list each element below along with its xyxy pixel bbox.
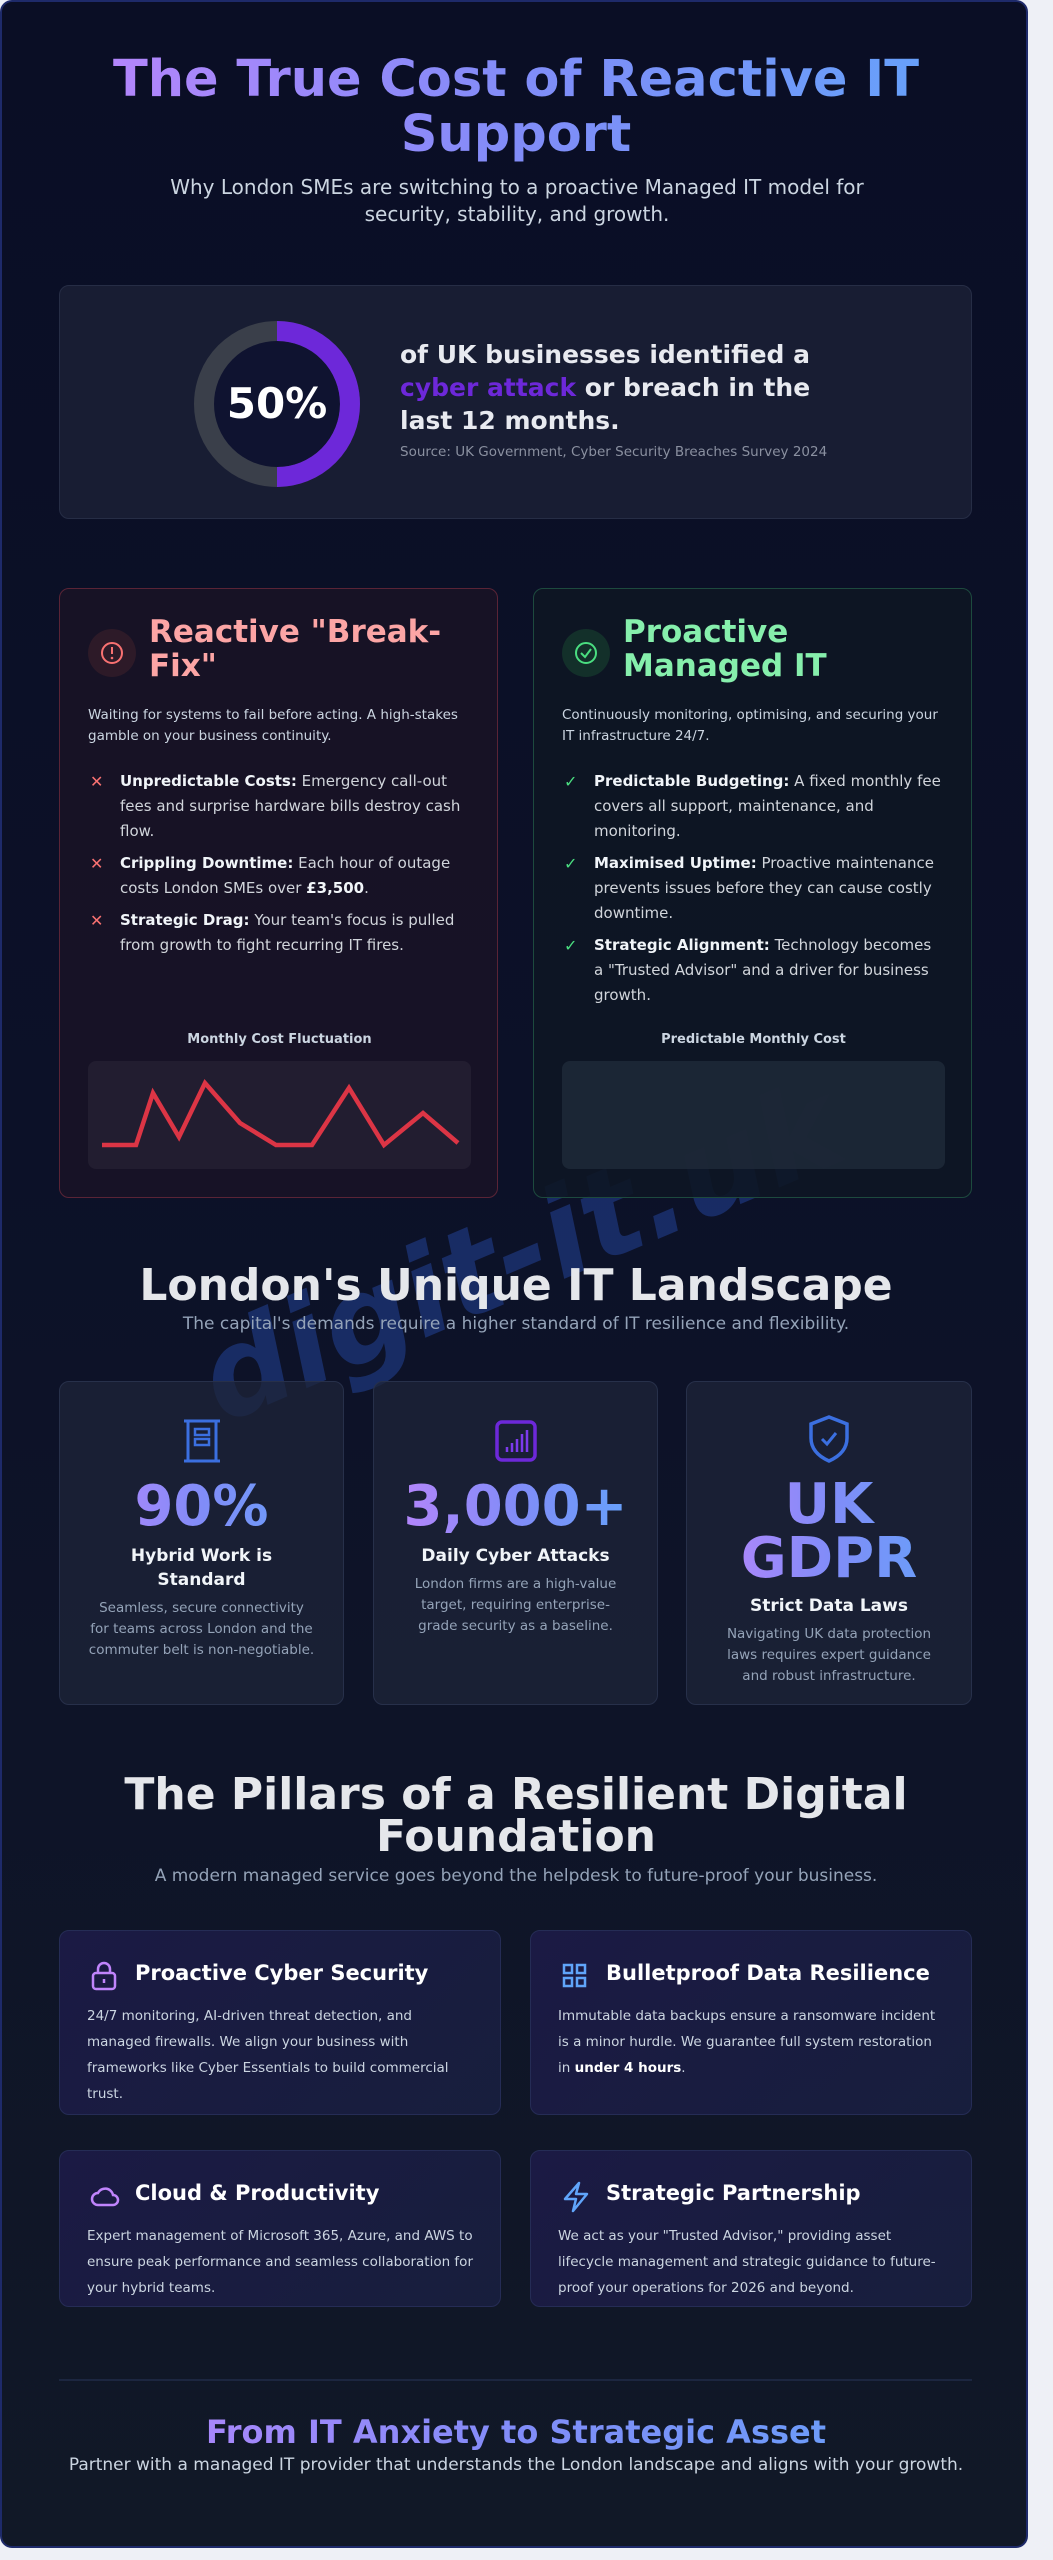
donut chart: 50% [227,379,327,428]
chart label: Predictable Monthly Cost [661,1032,846,1047]
stat card: hybrid: for teams across London and the [90,1621,313,1637]
subheading: landscape: The capital's demands require a higher standard of IT resilience and flexibility. [183,1314,849,1334]
footer text: Partner with a managed IT provider that understands the London landscape and aligns with your growth. [69,2455,963,2475]
icon: building [184,1420,220,1462]
panel: 50% stat [59,285,972,519]
bullet list: ✕ [90,911,103,930]
heading: Fix" [149,648,217,684]
pillar: partnership [530,2150,972,2307]
stat card: hybrid: commuter belt is non-negotiable. [89,1642,314,1658]
stat text: of UK businesses identified a cyber attack or breach in the last 12 months. [400,340,810,435]
pillar: partnership: Strategic Partnership [606,2181,861,2205]
pillar: data resilience [530,1930,972,2115]
heading: Reactive "Break- [149,614,441,650]
pillar: cyber security: Proactive Cyber Security [135,1961,428,1985]
pillar: cloud: Expert management of Microsoft 365, Azure, and AWS to ensure peak performance and seamless collaboration for your hybrid teams. [87,2228,473,2296]
icon: cloud [90,2187,120,2206]
icon: alert [88,629,136,677]
stat card: attacks: 3,000+ [403,1474,628,1539]
icon: grid [562,1964,586,1988]
stat card: hybrid: 90% [134,1474,269,1539]
bullet list [90,772,460,954]
chart area [562,1061,945,1169]
pillar: cloud [59,2150,501,2307]
stat card: attacks: target, requiring enterprise- [421,1597,610,1613]
bullet list: Predictable Budgeting: A fixed monthly fee covers all support, maintenance, and monitoring. [594,772,941,840]
heading [623,614,827,684]
bullet list: Strategic Drag: Your team's focus is pulled from growth to fight recurring IT fires. [120,911,454,954]
stat card: hybrid: Hybrid Work is [131,1546,272,1566]
pillar: partnership: We act as your "Trusted Advisor," providing asset lifecycle management and strategic guidance to future-proof your operations for 2026 and beyond. [558,2228,936,2296]
stat card: gdpr: Strict Data Laws [750,1596,908,1616]
stat card: gdpr: and robust infrastructure. [742,1668,916,1684]
stat card: gdpr: GDPR [741,1526,917,1591]
title: The True Cost of Reactive IT [113,50,919,109]
stat card: gdpr: Navigating UK data protection [727,1626,931,1642]
bullet list: Strategic Alignment: Technology becomes a "Trusted Advisor" and a driver for business growth. [594,936,931,1004]
chart label: Monthly Cost Fluctuation [187,1032,372,1047]
stat card: attacks: Daily Cyber Attacks [421,1546,610,1566]
footer heading: From IT Anxiety to Strategic Asset [206,2413,826,2451]
heading: pillars [124,1769,908,1862]
pillar: data resilience: Bulletproof Data Resilience [606,1961,930,1985]
subheading: pillars: A modern managed service goes beyond the helpdesk to future-proof your business. [155,1866,877,1886]
stat card: attacks: grade security as a baseline. [418,1618,613,1634]
bullet list: Unpredictable Costs: Emergency call-out fees and surprise hardware bills destroy cash flow. [120,772,460,840]
heading [149,614,441,684]
donut chart [194,321,360,487]
stat card: gdpr [686,1381,972,1705]
icon: shield [809,1415,849,1463]
stat card: gdpr: laws requires expert guidance [727,1647,931,1663]
heading: Managed IT [623,648,827,684]
description: Waiting for systems to fail before acting. A high-stakes gamble on your business continuity. [88,707,458,744]
source: Source: UK Government, Cyber Security Breaches Survey 2024 [400,444,827,460]
subtitle: Why London SMEs are switching to a proactive Managed IT model for security, stability, and growth. [170,175,864,226]
title: Support [401,105,631,164]
description: Continuously monitoring, optimising, and securing your IT infrastructure 24/7. [562,707,938,744]
bullet list: Crippling Downtime: Each hour of outage costs London SMEs over £3,500. [120,854,450,897]
bullet list: ✕ [90,772,103,791]
pillar: cloud: Cloud & Productivity [135,2181,379,2205]
stat card: hybrid [59,1381,344,1705]
bullet list: ✕ [90,854,103,873]
bullet list: ✓ [564,854,577,873]
bullet list: ✓ [564,936,577,955]
panel: proactive [533,588,972,1198]
stat card: hybrid: Seamless, secure connectivity [99,1600,304,1616]
pillar: cyber security: 24/7 monitoring, AI-driven threat detection, and managed firewalls. We align your business with frameworks like Cyber Essentials to build commercial trust. [87,2008,449,2102]
icon: chart [495,1420,537,1462]
heading: Proactive [623,614,788,650]
heading: pillars: Foundation [376,1811,656,1862]
pillar: data resilience: Immutable data backups ensure a ransomware incident is a minor hurdle. We guarantee full system restoration in under 4 hours. [558,2008,935,2076]
stat card: hybrid: Standard [157,1570,246,1590]
bullet list [564,772,941,1004]
icon: check [562,629,610,677]
icon: bolt [564,2182,588,2212]
title [2,52,1030,162]
stat card: attacks: London firms are a high-value [415,1576,616,1592]
bullet list: Maximised Uptime: Proactive maintenance prevents issues before they can cause costly downtime. [594,854,934,922]
stat card: gdpr: UK [785,1472,873,1537]
bullet list: ✓ [564,772,577,791]
heading: landscape: London's Unique IT Landscape [139,1260,893,1311]
panel: reactive [59,588,498,1198]
icon: lock [92,1962,116,1990]
watermark: digit-it.uk [178,1053,862,1451]
line chart [88,1061,471,1169]
heading: pillars: The Pillars of a Resilient Digital [124,1769,908,1820]
footer heading [2,2412,1030,2452]
stat card: attacks [373,1381,658,1705]
pillar: cyber security [59,1930,501,2115]
